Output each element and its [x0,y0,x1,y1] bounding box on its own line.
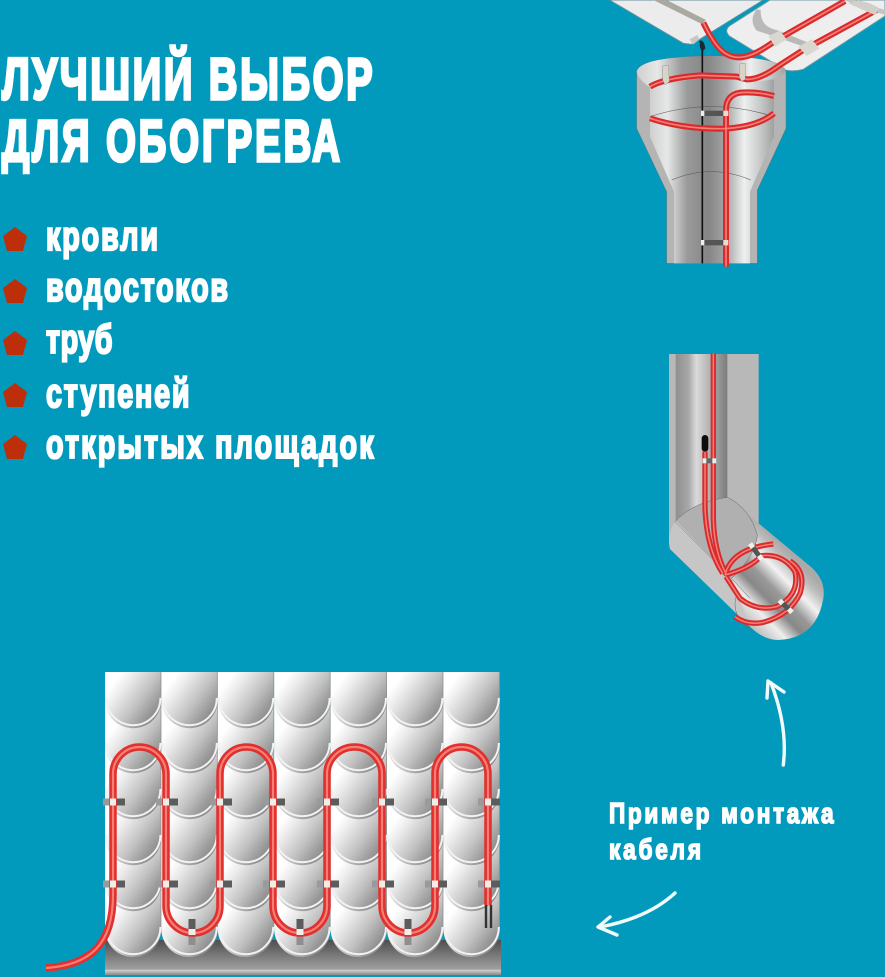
illustration: drain pipe elbow with heating cable [669,353,824,640]
title: ЛУЧШИЙ ВЫБОР [2,45,373,112]
list item: открытых площадок: открытых площадок [46,422,374,467]
roof tiles [105,652,500,957]
roof base band [105,940,501,975]
cable clips on roof [103,798,500,945]
list item: кровли: кровли [46,214,158,259]
cable end tails [486,905,491,928]
funnel body [637,56,786,263]
arrow: up to drain pipe [767,681,784,765]
straight pipe section [669,354,759,541]
cable clips [663,65,669,85]
list item: труб: труб [46,317,113,362]
clip centers over cable [110,798,491,935]
illustration: tiled roof with heating cable [105,652,501,975]
title: ДЛЯ ОБОГРЕВА [2,110,340,174]
arrow: down to roof [598,893,675,935]
caption: кабеля [609,832,701,866]
list item: водостоков: водостоков [46,265,228,310]
elbow section [669,497,824,640]
list item: ступеней: ступеней [46,371,189,416]
elbow clamps [703,458,717,463]
serpentine heating cable [46,747,488,968]
illustration: funnel with gutter and heating cable [609,0,885,267]
black sensor wire [700,45,705,263]
clamps on funnel [701,111,728,116]
gutter [727,0,885,71]
roof edge panel [609,0,763,44]
bullet list [3,214,374,467]
list item: труб [3,317,113,362]
title [2,45,373,174]
heating cable on funnel [650,1,877,267]
caption: Пример монтажа [609,796,834,830]
temperature sensor [702,435,708,452]
caption [609,796,834,866]
heating cable on elbow [705,353,802,623]
